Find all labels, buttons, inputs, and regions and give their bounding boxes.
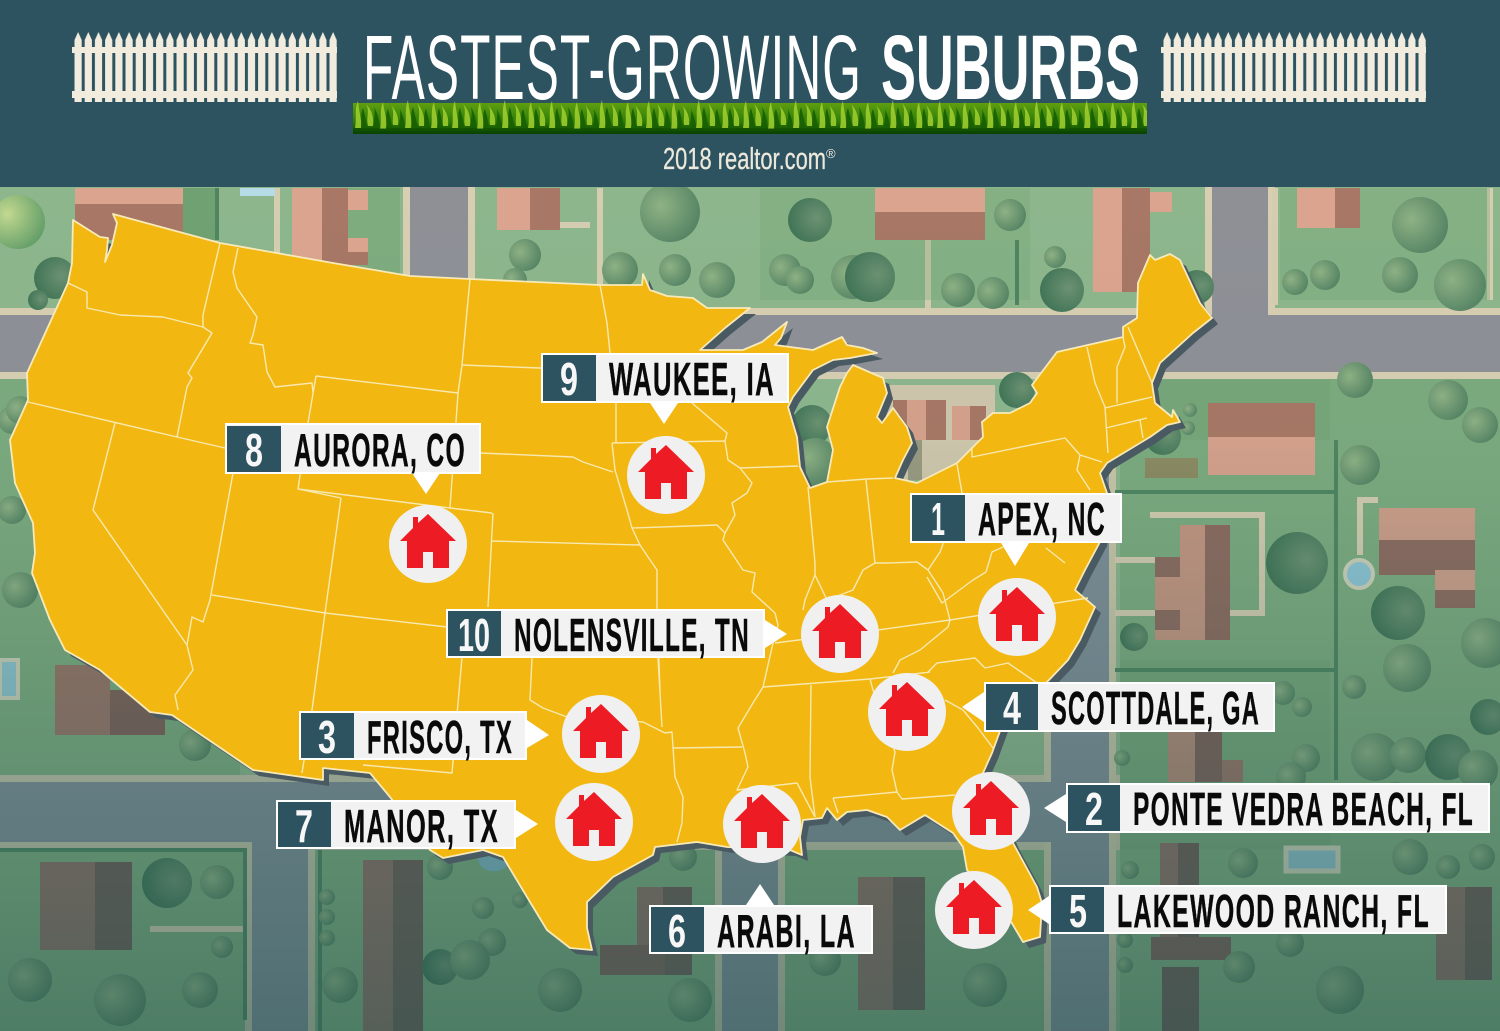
houses (40, 188, 1492, 1031)
marker: 2 Ponte Vedra Beach, FL: 2 (1085, 783, 1103, 835)
marker: 8 Aurora, CO: AURORA, CO (294, 424, 466, 476)
right picket fence (1161, 32, 1426, 102)
subtitle: ® (826, 146, 836, 161)
marker: 9 Waukee, IA: 9 (560, 353, 578, 405)
map shadow (16, 220, 1218, 956)
marker: 10 Nolensville, TN: 10 (458, 609, 490, 661)
title: FASTEST-GROWING (363, 17, 862, 119)
marker: 10 Nolensville, TN: NOLENSVILLE, TN (514, 609, 750, 661)
marker: 8 Aurora, CO: 8 (245, 424, 263, 476)
marker: 4 Scottdale, GA (868, 673, 1274, 751)
marker: 1 Apex, NC: 1 (931, 493, 945, 545)
header banner: SUBURBS (881, 17, 1140, 119)
marker: 7 Manor, TX: MANOR, TX (344, 800, 499, 852)
grass (353, 98, 1147, 134)
marker: 3 Frisco, TX: FRISCO, TX (367, 711, 513, 763)
marker: 1 Apex, NC (911, 493, 1121, 656)
marker: 9 Waukee, IA: WAUKEE, IA (609, 353, 775, 405)
marker: 5 Lakewood Ranch, FL: 5 (1069, 885, 1087, 937)
marker: 3 Frisco, TX: 3 (318, 711, 336, 763)
marker: 6 Arabi, LA: ARABI, LA (717, 905, 856, 957)
yards and paths (150, 188, 1490, 929)
marker: 1 Apex, NC: APEX, NC (978, 493, 1106, 545)
marker: 9 Waukee, IA (542, 353, 788, 514)
marker: 4 Scottdale, GA: SCOTTDALE, GA (1051, 682, 1260, 734)
marker: 7 Manor, TX: 7 (295, 800, 313, 852)
marker: 2 Ponte Vedra Beach, FL (952, 772, 1489, 850)
marker: 8 Aurora, CO (226, 424, 480, 583)
left picket fence (72, 32, 337, 102)
plot behind Michigan (885, 385, 995, 480)
marker: 10 Nolensville, TN (447, 595, 879, 673)
map: contiguous United States (10, 214, 1212, 950)
marker: 6 Arabi, LA (650, 785, 872, 957)
header banner (0, 0, 1500, 187)
subtitle: 2018 realtor.com (663, 141, 826, 176)
marker: 7 Manor, TX (277, 783, 633, 861)
pools (0, 188, 1373, 871)
marker: 5 Lakewood Ranch, FL (935, 871, 1446, 949)
marker: 4 Scottdale, GA: 4 (1003, 682, 1021, 734)
state borders (28, 243, 1152, 842)
marker: 3 Frisco, TX (300, 695, 640, 773)
marker: 6 Arabi, LA: 6 (668, 905, 686, 957)
